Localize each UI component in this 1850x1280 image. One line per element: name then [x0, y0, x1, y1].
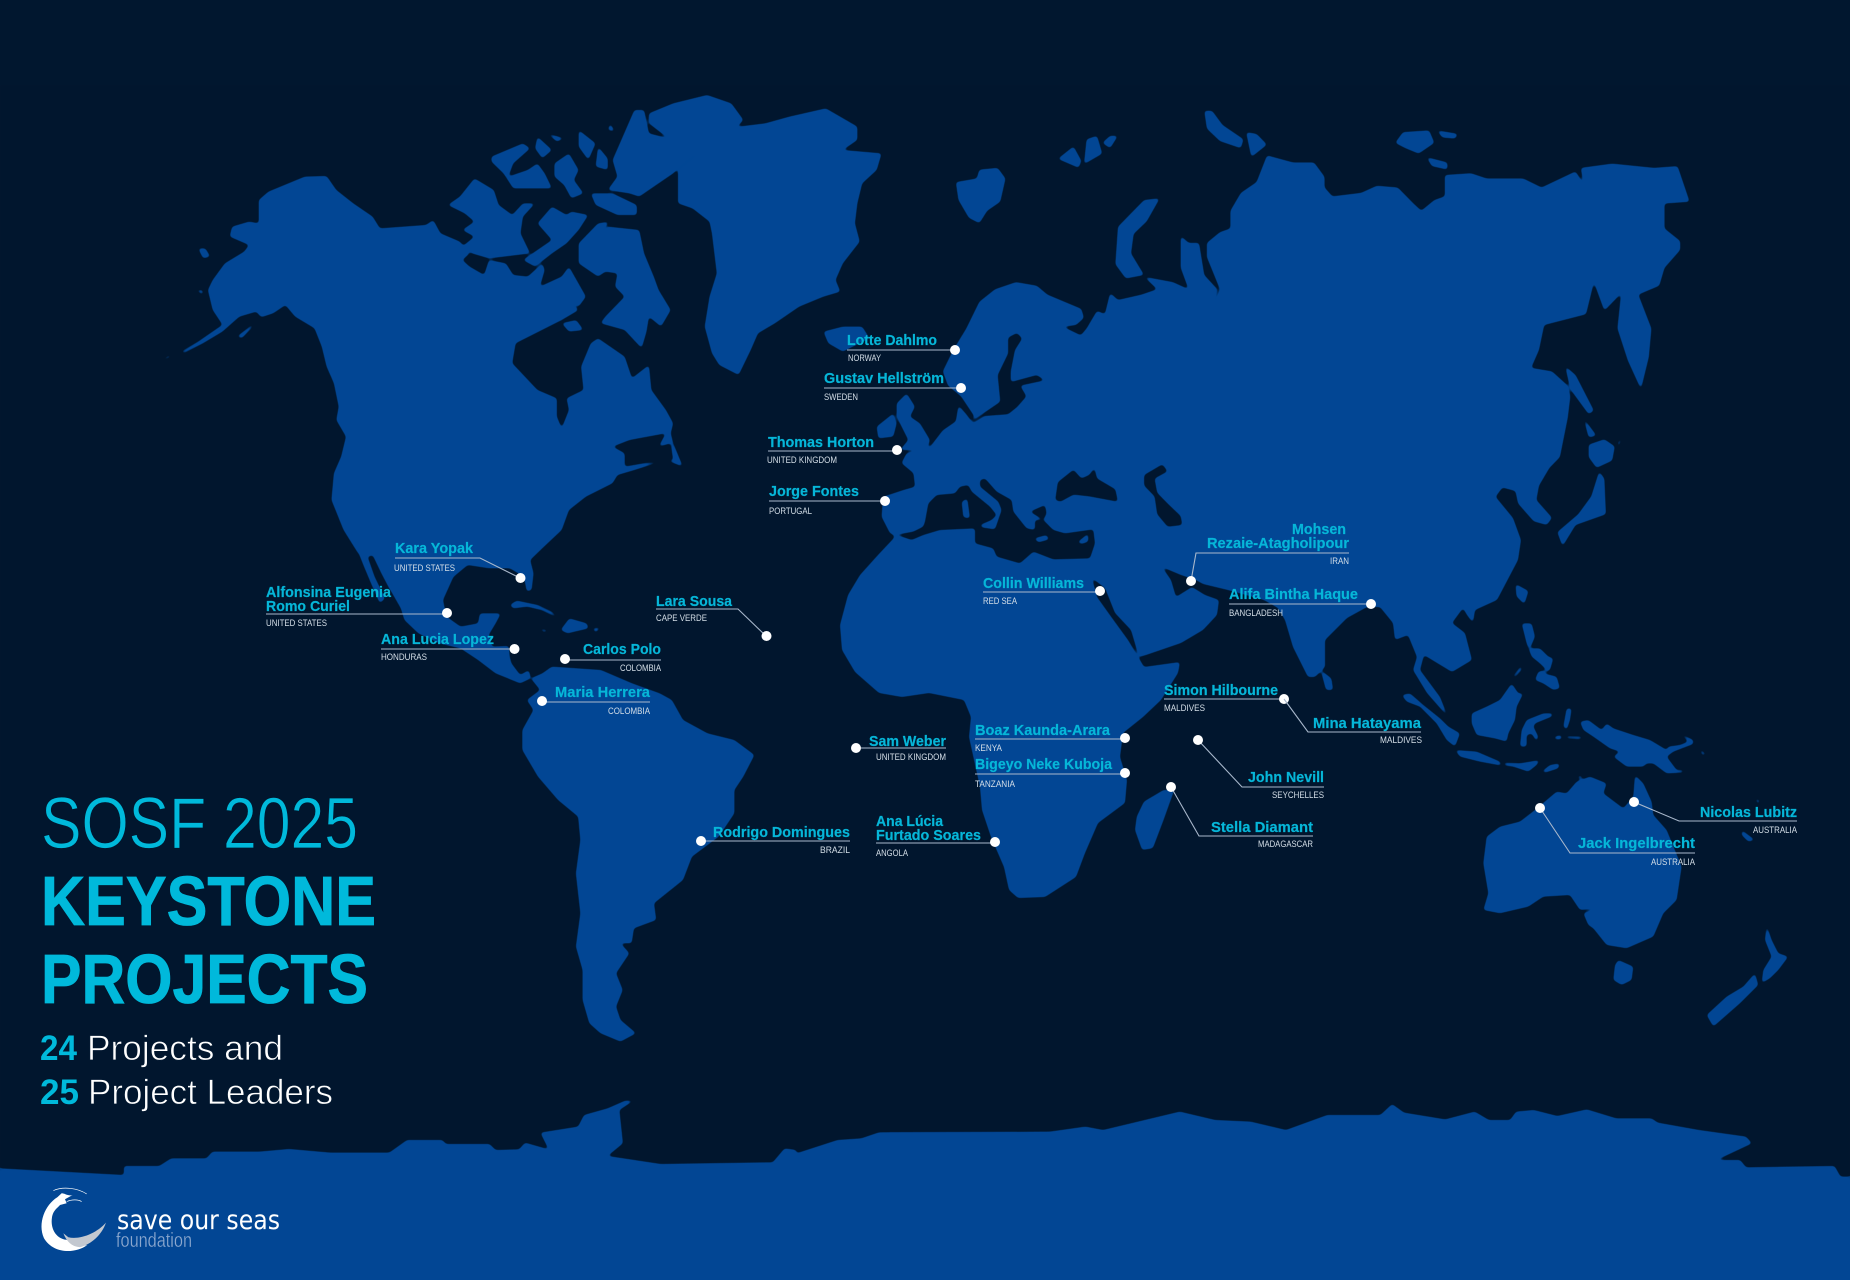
United Kingdom and Ireland — [877, 393, 930, 450]
label: Bigeyo Neke Kuboja: Bigeyo Neke Kuboja — [975, 756, 1113, 773]
label: Gustav Hellström: Gustav Hellström — [824, 370, 944, 387]
title line: KEYSTONE: KEYSTONE — [41, 862, 376, 940]
label: Boaz Kaunda-Arara: Boaz Kaunda-Arara — [975, 722, 1111, 739]
label: Lara Sousa — [656, 593, 772, 641]
label: Thomas Horton: Thomas Horton — [768, 434, 874, 451]
label: Lotte Dahlmo: Lotte Dahlmo — [847, 332, 937, 349]
label: Jack Ingelbrecht — [1535, 803, 1696, 868]
label: Mohsen Rezaie-Atagholipour: Rezaie-Atagholipour — [1207, 535, 1349, 552]
label: Kara Yopak: UNITED STATES — [394, 563, 455, 574]
label: Maria Herrera — [537, 684, 651, 717]
Eurasia — [882, 111, 1690, 604]
label: Alifa Bintha Haque: BANGLADESH — [1229, 608, 1283, 619]
label: Alifa Bintha Haque: Alifa Bintha Haque — [1229, 586, 1358, 603]
label: Rodrigo Domingues: BRAZIL — [820, 845, 850, 856]
logo: Save Our Seas Foundation: save our seas — [117, 1205, 280, 1236]
label: Ana Lúcia Furtado Soares: Ana Lúcia — [876, 813, 944, 830]
label: Jorge Fontes: Jorge Fontes — [769, 483, 859, 500]
label: Boaz Kaunda-Arara — [975, 722, 1130, 754]
South America — [522, 667, 754, 1042]
label: Mohsen Rezaie-Atagholipour — [1186, 521, 1349, 586]
label: Alfonsina Eugenia Romo Curiel: Romo Curiel — [266, 598, 350, 615]
label: Collin Williams: RED SEA — [983, 596, 1018, 607]
North America and Greenland — [155, 95, 882, 592]
logo: Save Our Seas Foundation: foundation — [116, 1230, 192, 1252]
label: Ana Lucia Lopez — [381, 631, 520, 663]
label: Maria Herrera: COLOMBIA — [608, 706, 651, 717]
label: Jorge Fontes — [769, 483, 890, 517]
title block — [40, 784, 376, 1112]
label: Ana Lúcia Furtado Soares: Furtado Soares — [876, 827, 981, 844]
label: Mina Hatayama — [1284, 699, 1422, 746]
label: Stella Diamant: Stella Diamant — [1211, 819, 1313, 836]
Central America and Caribbean — [339, 520, 601, 683]
label: Jorge Fontes: PORTUGAL — [769, 506, 812, 517]
label: Stella Diamant — [1166, 782, 1313, 850]
label: Jack Ingelbrecht: AUSTRALIA — [1651, 857, 1696, 868]
label: Boaz Kaunda-Arara: KENYA — [975, 743, 1003, 754]
subtitle: 24 projects: Projects and — [87, 1029, 283, 1068]
logo: Save Our Seas Foundation — [42, 1188, 280, 1252]
label: Lotte Dahlmo: NORWAY — [848, 353, 882, 364]
label: Lara Sousa: CAPE VERDE — [656, 613, 707, 624]
label: Kara Yopak — [394, 540, 526, 583]
label: Ana Lúcia Furtado Soares — [876, 813, 1000, 859]
label: Carlos Polo: Carlos Polo — [583, 641, 661, 658]
title line: SOSF 2025: SOSF 2025 — [41, 784, 358, 864]
label: Bigeyo Neke Kuboja — [975, 756, 1130, 790]
label: Carlos Polo — [560, 641, 662, 674]
label: Gustav Hellström — [824, 370, 966, 403]
label: Simon Hilbourne: MALDIVES — [1164, 703, 1205, 714]
label: Lara Sousa: Lara Sousa — [656, 593, 733, 610]
label: Lotte Dahlmo — [847, 332, 960, 364]
label: John Nevill: SEYCHELLES — [1272, 790, 1324, 801]
label: Bigeyo Neke Kuboja: TANZANIA — [975, 779, 1016, 790]
subtitle: 24 projects: 24 — [40, 1029, 78, 1068]
Antarctica band — [0, 1101, 1850, 1280]
subtitle: 25 project leaders: 25 — [40, 1073, 79, 1112]
label: Collin Williams — [983, 575, 1105, 607]
Madagascar and Sri Lanka — [1135, 670, 1333, 850]
Southeast Asia and Oceania — [1402, 623, 1788, 1027]
label: Ana Lucia Lopez: HONDURAS — [381, 652, 427, 663]
label: Sam Weber — [851, 733, 946, 763]
label: Ana Lúcia Furtado Soares: ANGOLA — [876, 848, 909, 859]
label: Collin Williams: Collin Williams — [983, 575, 1084, 592]
label: Mohsen Rezaie-Atagholipour: Mohsen — [1292, 521, 1346, 538]
label: Thomas Horton — [767, 434, 902, 466]
label: Mina Hatayama: MALDIVES — [1380, 735, 1422, 746]
Africa — [840, 530, 1180, 898]
subtitle: 25 project leaders: Project Leaders — [88, 1073, 333, 1112]
label: John Nevill — [1193, 735, 1324, 801]
label: Kara Yopak: Kara Yopak — [395, 540, 474, 557]
label: Carlos Polo: COLOMBIA — [620, 663, 662, 674]
label: Thomas Horton: UNITED KINGDOM — [767, 455, 837, 466]
label: Simon Hilbourne: Simon Hilbourne — [1164, 682, 1278, 699]
label: Alfonsina Eugenia Romo Curiel: Alfonsina Eugenia — [266, 584, 392, 601]
title line: PROJECTS: PROJECTS — [41, 940, 368, 1018]
label: Rodrigo Domingues — [696, 824, 850, 856]
icon: wave swirl — [42, 1188, 106, 1251]
label: Mohsen Rezaie-Atagholipour: IRAN — [1330, 556, 1349, 567]
Mediterranean Sea — [895, 478, 1095, 563]
label: Alifa Bintha Haque — [1229, 586, 1376, 619]
label: Jack Ingelbrecht: Jack Ingelbrecht — [1578, 835, 1695, 852]
label: Ana Lucia Lopez: Ana Lucia Lopez — [381, 631, 494, 648]
label: Nicolas Lubitz: AUSTRALIA — [1753, 825, 1798, 836]
label: Stella Diamant: MADAGASCAR — [1258, 839, 1313, 850]
South Asia — [1092, 490, 1521, 717]
label: Nicolas Lubitz: Nicolas Lubitz — [1700, 804, 1797, 821]
label: Nicolas Lubitz — [1629, 797, 1798, 836]
label: Sam Weber: UNITED KINGDOM — [876, 752, 946, 763]
label: Mina Hatayama: Mina Hatayama — [1313, 715, 1422, 732]
label: Rodrigo Domingues: Rodrigo Domingues — [713, 824, 850, 841]
label: Maria Herrera: Maria Herrera — [555, 684, 651, 701]
label: Gustav Hellström: SWEDEN — [824, 392, 858, 403]
label: Simon Hilbourne — [1164, 682, 1289, 714]
label: Alfonsina Eugenia Romo Curiel — [266, 584, 452, 629]
label: John Nevill: John Nevill — [1248, 769, 1324, 786]
label: Sam Weber: Sam Weber — [869, 733, 946, 750]
label: Alfonsina Eugenia Romo Curiel: UNITED STATES — [266, 618, 327, 629]
